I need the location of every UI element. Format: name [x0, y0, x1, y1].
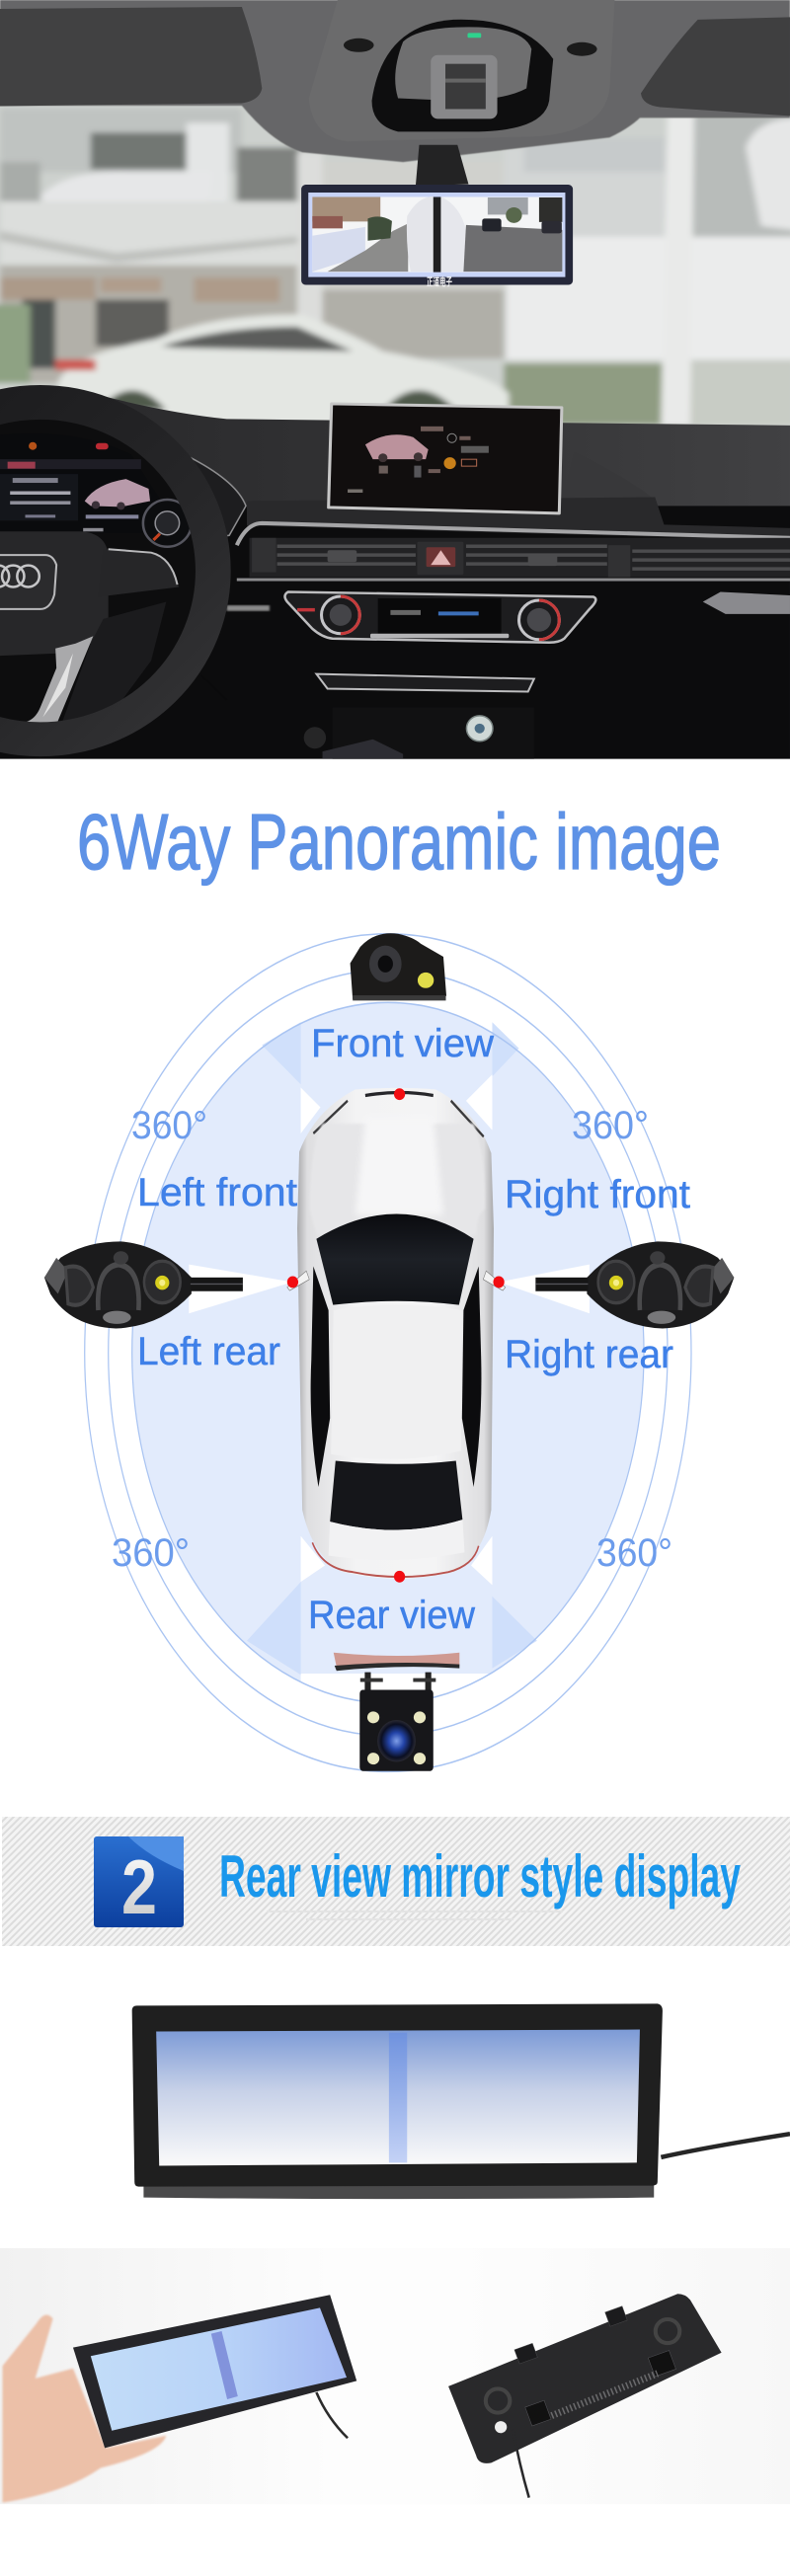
left sun visor — [0, 7, 262, 106]
hand holding mirror — [3, 2314, 166, 2503]
label: right front: Right front — [505, 1173, 690, 1216]
label: left front: Left front — [137, 1171, 297, 1214]
rear view mirror display in photo — [301, 185, 573, 285]
number badge: 2 — [121, 1843, 157, 1930]
air vents and hazard button — [237, 523, 790, 582]
right sun visor — [641, 17, 790, 116]
number badge — [94, 1836, 184, 1930]
centre console controls — [304, 715, 534, 759]
roof headliner — [0, 0, 790, 162]
mirror mount — [416, 145, 468, 186]
centre infotainment screen — [329, 404, 562, 513]
left side camera — [44, 1241, 243, 1329]
label: 360 bottom left: 360° — [112, 1531, 190, 1575]
label: 360 top left: 360° — [131, 1104, 207, 1147]
right side camera — [535, 1241, 734, 1329]
lower button strip — [316, 674, 534, 691]
rear camera — [334, 1653, 459, 1771]
label: rear view: Rear view — [308, 1594, 475, 1637]
panel: car interior photo — [0, 0, 790, 766]
label: left rear: Left rear — [137, 1330, 280, 1373]
label on the mirror bezel: 正道电子 — [427, 274, 452, 288]
panel: panoramic camera diagram — [44, 933, 734, 1771]
steering wheel and instrument cluster — [0, 402, 246, 742]
photo background — [0, 2248, 790, 2504]
angled mirror front — [73, 2295, 356, 2448]
climate control panel — [227, 591, 790, 643]
mirror rear side — [448, 2294, 722, 2498]
panel: product photos — [0, 2003, 790, 2504]
concentric range rings — [85, 934, 691, 1771]
camera position markers — [287, 1088, 505, 1583]
dashboard — [106, 397, 790, 506]
windshield outside scene — [0, 101, 790, 434]
view coverage area — [132, 1002, 644, 1713]
front camera — [351, 933, 446, 1000]
label: right rear: Right rear — [505, 1333, 673, 1376]
overhead console — [338, 0, 614, 132]
label: 360 bottom right: 360° — [596, 1531, 672, 1575]
label: front view: Front view — [311, 1022, 494, 1065]
section banner — [2, 1817, 790, 1946]
large mirror front — [132, 2003, 790, 2199]
label: 360 top right: 360° — [572, 1104, 649, 1147]
car top view — [287, 1088, 506, 1579]
